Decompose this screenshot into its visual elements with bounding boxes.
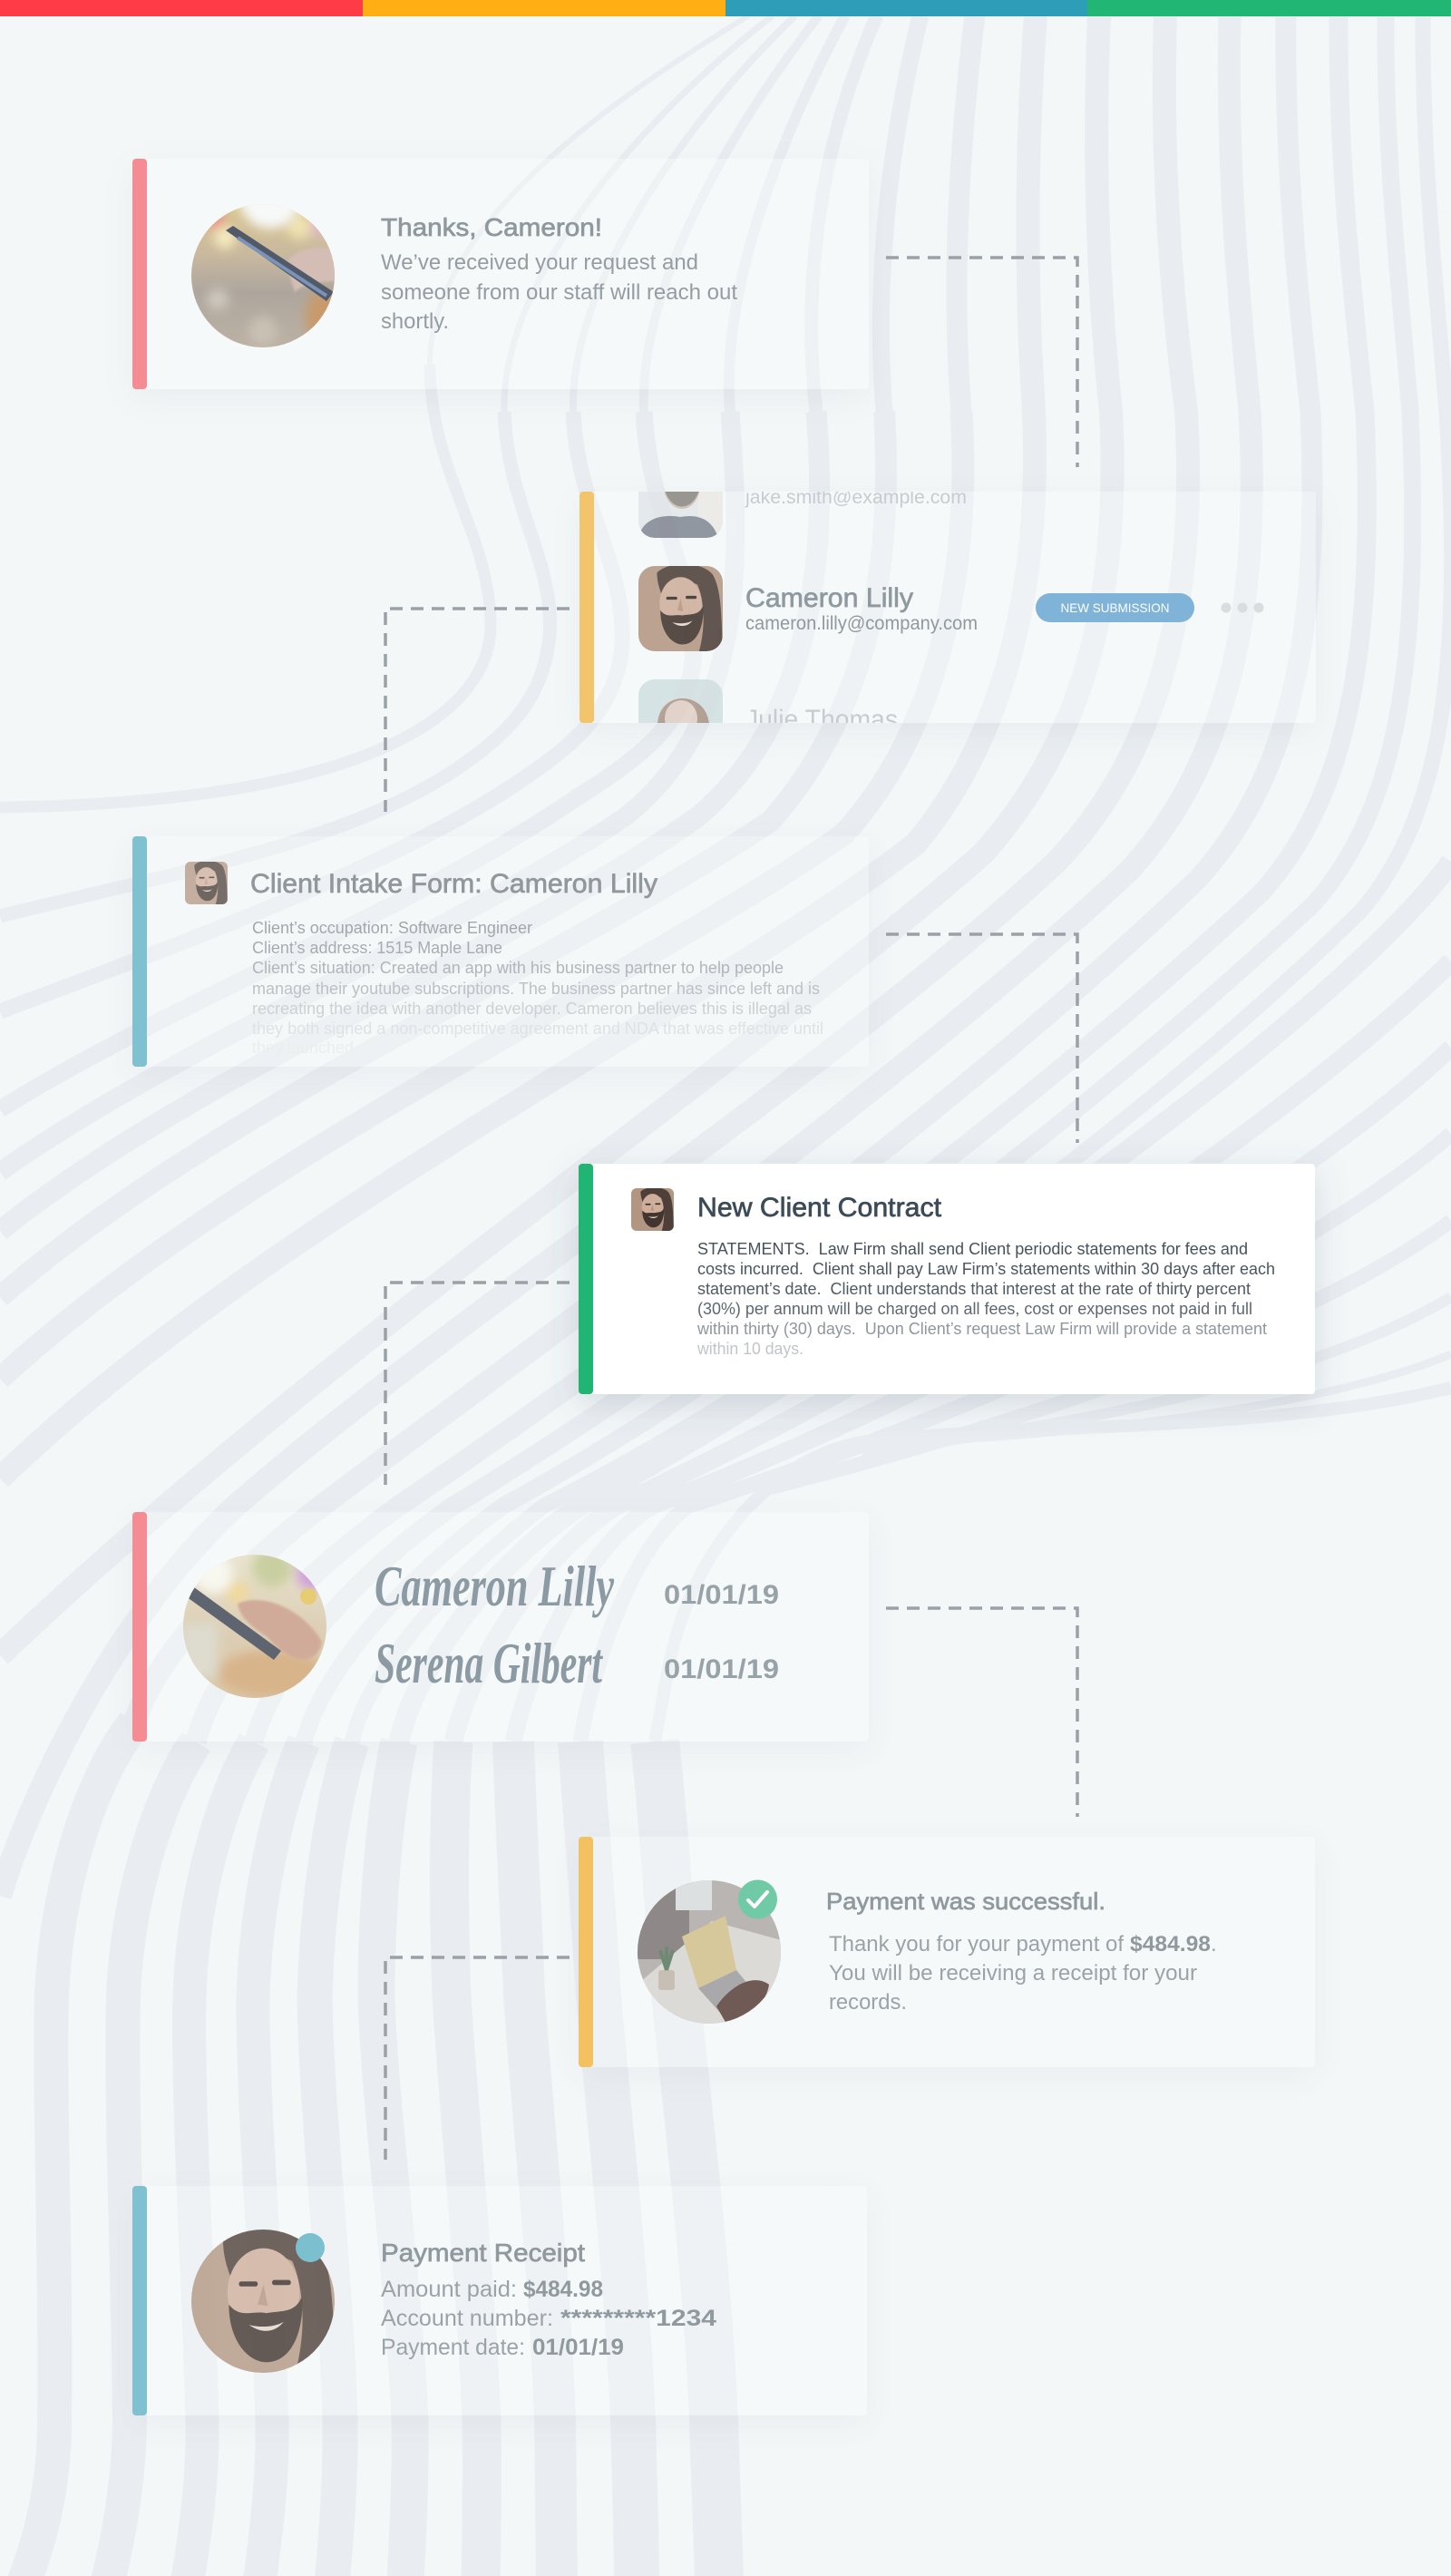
receipt: payment date: 01/01/19 — [532, 2335, 624, 2360]
form details with fade — [252, 919, 823, 1057]
dashed connector 1 — [886, 258, 1077, 467]
top colour bar — [0, 0, 1451, 16]
body text — [381, 250, 737, 334]
photo: laptop on desk — [635, 1878, 784, 2030]
form details with fade: Client’s occupation: Software Engineer — [252, 919, 532, 937]
signature date 1: 01/01/19 — [664, 1580, 779, 1610]
receipt: payment date: Payment date: — [381, 2335, 525, 2360]
body text: We’ve received your request and — [381, 250, 698, 275]
heading: Client Intake Form: Cameron Lilly — [250, 869, 657, 899]
contact email: cameron.lilly@company.com — [745, 613, 978, 634]
body text: . — [1211, 1932, 1217, 1956]
receipt: account number — [381, 2306, 716, 2331]
heading: New Client Contract — [697, 1193, 942, 1223]
status dot — [296, 2233, 325, 2262]
contract text with fade: (30%) per annum will be charged on all fees, cost or expenses not paid in full — [697, 1300, 1252, 1318]
heading: Payment was successful. — [826, 1888, 1105, 1915]
contract text with fade: costs incurred. Client shall pay Law Firm’s statements within 30 days after each — [697, 1260, 1275, 1278]
panel: submissions list — [579, 492, 1264, 723]
body text: someone from our staff will reach out — [381, 280, 737, 305]
receipt: amount paid — [381, 2277, 603, 2302]
contract text with fade: within 10 days. — [696, 1340, 803, 1358]
new submission badge: NEW SUBMISSION — [1061, 600, 1170, 615]
contact name: Cameron Lilly — [745, 583, 913, 613]
receipt: amount paid: $484.98 — [523, 2277, 603, 2302]
panel: signatures — [132, 1512, 778, 1742]
form details with fade: they both signed a non-competitive agreement and NDA that was effective until — [252, 1020, 823, 1038]
contract text with fade: STATEMENTS. Law Firm shall send Client periodic statements for fees and — [697, 1240, 1248, 1258]
panel: new client contract — [579, 1164, 1315, 1394]
body text: $484.98 — [1130, 1932, 1211, 1956]
photo: hand holding phone — [191, 204, 335, 347]
receipt: account number: Account number: — [381, 2306, 553, 2331]
form details with fade: recreating the idea with another developer. Cameron believes this is illegal as — [252, 1000, 812, 1018]
dashed connector 4 — [385, 1283, 570, 1485]
contract text with fade: statement’s date. Client understands that interest at the rate of thirty percent — [697, 1280, 1251, 1298]
panel: payment receipt — [132, 2186, 716, 2415]
form details with fade: they launched — [252, 1039, 354, 1057]
body text: records. — [829, 1990, 907, 2015]
receipt: amount paid: Amount paid: — [381, 2277, 517, 2302]
form details with fade: Client’s address: 1515 Maple Lane — [252, 939, 502, 957]
photo: signing on a tablet — [183, 1555, 326, 1698]
body text — [829, 1932, 1217, 2015]
signature: Cameron Lilly: Cameron Lilly — [375, 1554, 614, 1618]
contract text with fade — [696, 1240, 1275, 1358]
form details with fade: manage their youtube subscriptions. The business partner has since left and is — [252, 980, 820, 998]
new submission badge — [1036, 593, 1194, 622]
email: previous contact: jake.smith@example.com — [745, 487, 967, 508]
body text: shortly. — [381, 309, 449, 334]
next contact name: Julie Thomas — [745, 705, 898, 735]
dashed connector 2 — [385, 609, 570, 812]
avatar: Cameron Lilly — [638, 564, 723, 651]
icon: success check badge — [738, 1879, 777, 1919]
avatar — [631, 1187, 674, 1231]
avatar: previous contact — [638, 492, 723, 538]
more options dots — [1221, 602, 1264, 613]
receipt: payment date — [381, 2335, 624, 2360]
contract text with fade: within thirty (30) days. Upon Client’s request Law Firm will provide a statement — [696, 1320, 1267, 1338]
receipt: account number: *********1234 — [560, 2306, 716, 2331]
body text: You will be receiving a receipt for your — [829, 1961, 1197, 1986]
form details with fade: Client’s situation: Created an app with his business partner to help people — [252, 959, 784, 977]
dashed connector 3 — [886, 934, 1077, 1143]
avatar: next contact — [638, 679, 723, 723]
panel: payment successful — [579, 1837, 1215, 2067]
photo: Cameron Lilly portrait — [191, 2226, 336, 2374]
panel: client intake form — [132, 836, 869, 1067]
heading: Thanks, Cameron! — [381, 213, 602, 241]
dashed connector 5 — [886, 1608, 1077, 1817]
signature date 2: 01/01/19 — [664, 1654, 779, 1684]
body text: Thank you for your payment of — [829, 1932, 1124, 1956]
heading: Payment Receipt — [381, 2239, 585, 2267]
avatar — [185, 861, 228, 904]
panel: thanks confirmation — [132, 159, 737, 389]
dashed connector 6 — [385, 1957, 570, 2160]
signature: Serena Gilbert: Serena Gilbert — [375, 1631, 603, 1695]
